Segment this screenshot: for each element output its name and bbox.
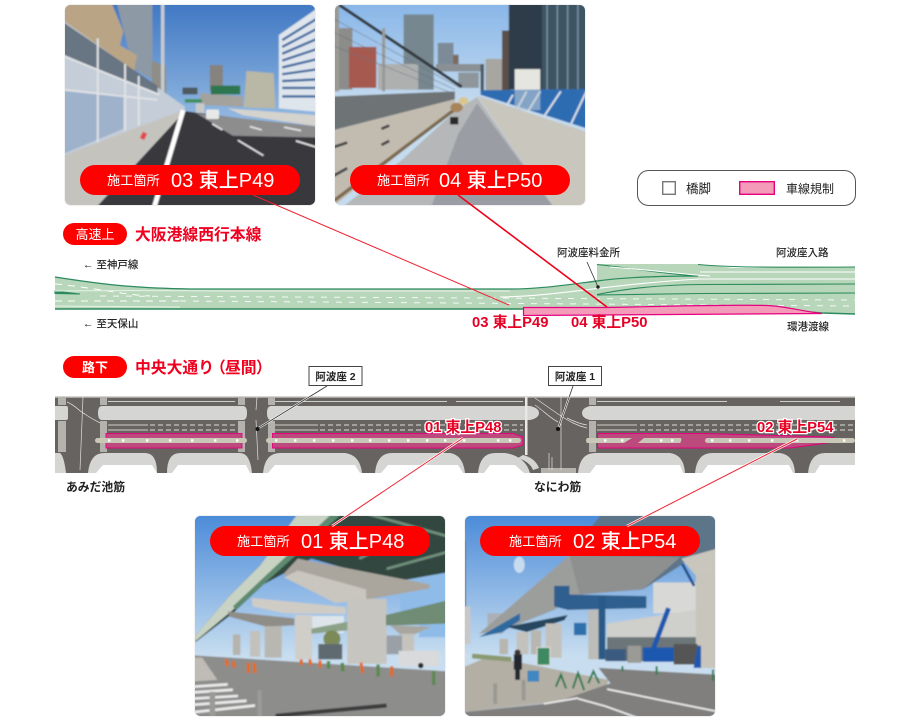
heading: surface road: （ [210, 359, 226, 377]
surface road map [55, 396, 855, 473]
heading: surface road [63, 356, 272, 378]
pill 04: 施工箇所 [377, 172, 430, 188]
photo 04 [332, 2, 588, 207]
marker label 01: 01 東上P48 [425, 419, 502, 436]
label: toll gate: 阿波座料金所 [557, 246, 620, 259]
pill 01: 01 東上P48 [301, 530, 404, 553]
heading: surface road: 中央大通り [135, 359, 214, 377]
label: amidaike-suji: あみだ池筋 [66, 480, 125, 494]
leader 04 [458, 195, 607, 307]
legend: 橋脚 [686, 181, 711, 196]
leader 01 [332, 438, 463, 526]
callout: awaza 1 [548, 366, 602, 431]
marker label 04: 04 東上P50 [571, 314, 648, 331]
callout: awaza 2 [256, 366, 362, 431]
marker label 03: 03 東上P49 [472, 314, 548, 331]
marker label 02: 02 東上P54 [757, 419, 834, 436]
pill 03: 施工箇所 [107, 172, 160, 188]
heading: expressway: 高速上 [75, 227, 115, 242]
lane restriction: 01 west [106, 434, 242, 448]
pill 03 [80, 165, 300, 195]
label: tenpozan: ← 至天保山 [83, 317, 138, 330]
legend [638, 170, 856, 206]
label: connector: 環港渡線 [787, 320, 829, 333]
pill 02 [480, 526, 700, 556]
pill 02: 02 東上P54 [573, 530, 676, 553]
pill 03: 03 東上P49 [171, 169, 274, 192]
heading: surface road: 昼間 [225, 359, 257, 377]
leader 02 [627, 439, 797, 526]
photo 02 [462, 514, 718, 718]
lane restriction: 01 east [272, 434, 523, 448]
expressway map [55, 264, 855, 316]
heading: expressway [63, 223, 262, 245]
photo 01 [192, 514, 448, 718]
callout: awaza 1: 阿波座 1 [555, 370, 595, 383]
lane restriction: 04 [524, 305, 822, 316]
pill 04: 04 東上P50 [439, 169, 542, 192]
legend: 車線規制 [786, 181, 834, 196]
label: kobe line: ← 至神戸線 [83, 258, 139, 271]
heading: expressway: 大阪港線西行本線 [135, 225, 262, 244]
pill 04 [350, 165, 570, 195]
pill 01: 施工箇所 [237, 533, 290, 549]
pill 01 [210, 526, 430, 556]
lane restriction: 02 [598, 434, 845, 448]
heading: surface road: ） [256, 359, 272, 377]
toll gate leader [587, 262, 600, 289]
photo 03 [62, 2, 318, 207]
callout: awaza 2: 阿波座 2 [315, 370, 356, 383]
leader 03 [253, 195, 509, 305]
label: entrance: 阿波座入路 [776, 246, 829, 259]
heading: surface road: 路下 [82, 360, 108, 375]
label: naniwa-suji: なにわ筋 [534, 480, 581, 494]
median strip with piers [95, 438, 855, 443]
pill 02: 施工箇所 [509, 533, 562, 549]
